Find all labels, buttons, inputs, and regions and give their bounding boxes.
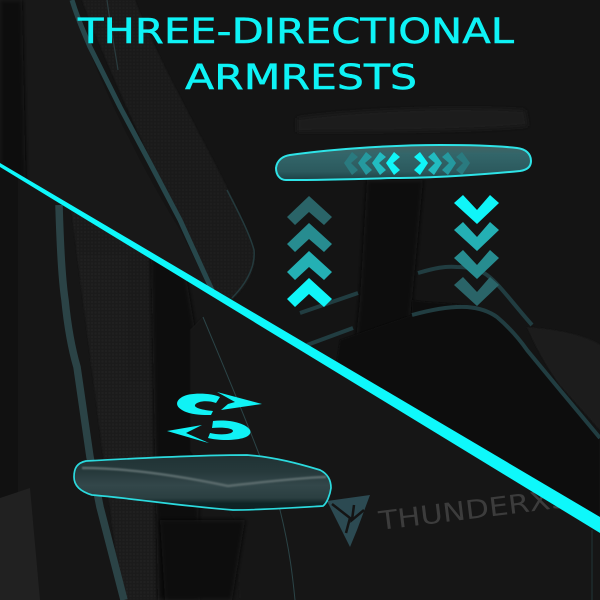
top armrest — [276, 145, 531, 180]
side piping — [59, 205, 124, 600]
seat piping — [300, 267, 600, 438]
bottom armrest — [74, 455, 331, 510]
backrest piping — [72, 0, 212, 290]
brand wordmark: THUNDERX3 — [376, 484, 571, 537]
upper scene: chair backrest and seat — [22, 0, 600, 439]
lower scene: chair side and seat — [0, 204, 592, 600]
down arrows — [454, 195, 499, 306]
title: ARMRESTS — [185, 58, 417, 98]
logo mark — [327, 495, 370, 547]
armrest post — [356, 180, 423, 332]
title: THREE-DIRECTIONAL — [77, 12, 515, 52]
left arrows — [344, 152, 400, 175]
shadow armrest — [299, 110, 525, 130]
diagonal divider line — [0, 163, 600, 533]
right arrows — [414, 152, 470, 175]
up arrows — [287, 196, 332, 307]
rotation arrows — [167, 392, 262, 443]
title — [77, 12, 515, 98]
